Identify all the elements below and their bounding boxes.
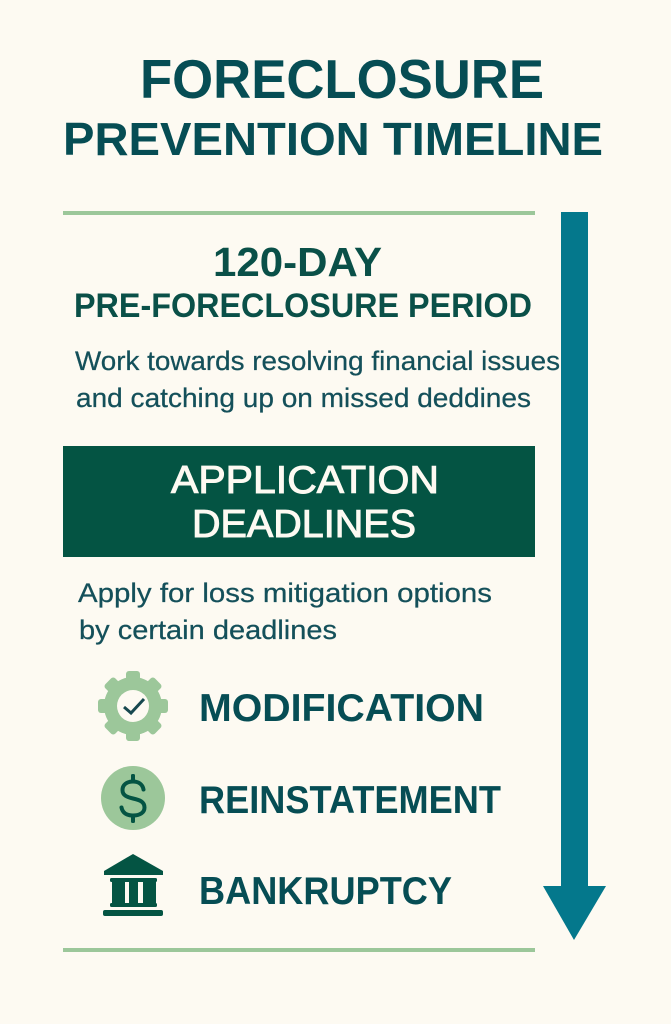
icon: gear with check (98, 671, 168, 741)
section heading: PRE-FORECLOSURE PERIOD (74, 287, 532, 325)
title: FORECLOSURE (140, 48, 544, 110)
icon: bank building (103, 854, 163, 916)
option: reinstatement (101, 766, 501, 830)
section description: and catching up on missed deddines (76, 383, 531, 413)
deadlines description: by certain deadlines (79, 615, 337, 645)
section description (75, 346, 560, 413)
timeline arrow (543, 212, 606, 940)
label: REINSTATEMENT (199, 779, 501, 822)
section description: Work towards resolving financial issues (75, 346, 560, 376)
section heading: 120-DAY (213, 239, 382, 285)
title (63, 48, 603, 165)
label: MODIFICATION (199, 687, 484, 730)
section: 120-day period (74, 239, 560, 413)
banner: application deadlines: APPLICATION (171, 459, 439, 502)
title: PREVENTION TIMELINE (63, 113, 603, 165)
icon: dollar coin (101, 766, 165, 830)
section heading (74, 239, 532, 325)
deadlines description (78, 578, 492, 645)
bottom divider (63, 948, 535, 952)
deadlines description: Apply for loss mitigation options (78, 578, 492, 608)
banner: application deadlines (63, 446, 535, 557)
banner: application deadlines: DEADLINES (192, 503, 416, 546)
option: modification (98, 671, 484, 741)
top divider (63, 211, 535, 215)
label: BANKRUPTCY (199, 870, 452, 913)
option: bankruptcy (103, 854, 452, 916)
